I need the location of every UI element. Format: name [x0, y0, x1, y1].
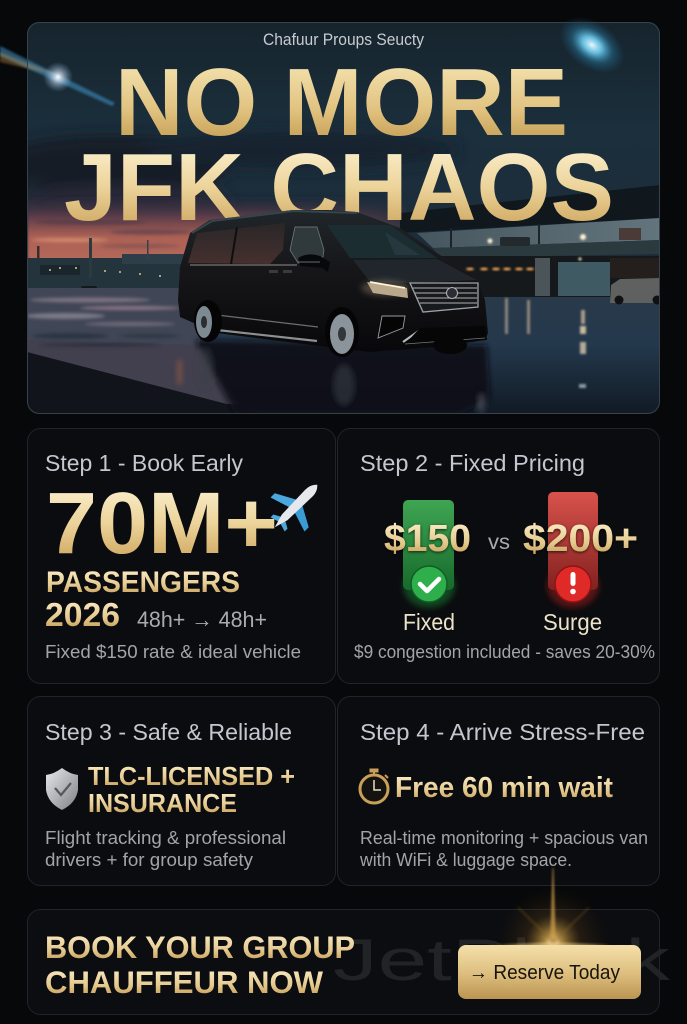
distant skyline	[28, 238, 184, 288]
panel: step 1	[28, 428, 336, 684]
step 3 description: drivers + for group safety	[45, 849, 254, 870]
step 3 description	[45, 827, 286, 870]
van headlight	[361, 280, 409, 296]
icon: stopwatch	[360, 769, 388, 803]
hero tagline: Chafuur Proups Seucty	[263, 30, 424, 49]
licence headline	[88, 761, 295, 818]
right ground light reflections	[505, 298, 586, 388]
step 4 description: with WiFi & luggage space.	[359, 849, 572, 870]
lens flare: right	[549, 6, 635, 84]
sky	[27, 22, 660, 258]
left wet ground, pink reflections	[25, 288, 240, 404]
step 1 heading: Step 1 - Book Early	[45, 450, 243, 476]
terminal glass band	[417, 218, 660, 248]
icon: shield	[46, 768, 78, 810]
CTA headline	[45, 929, 355, 1000]
headline	[66, 68, 610, 221]
surge price: $200+	[523, 518, 638, 560]
headline: JFK CHAOS	[64, 134, 614, 241]
reserve button: → Reserve Today	[469, 961, 621, 984]
panel: call to action	[28, 868, 672, 1014]
chart: surge price bar	[547, 492, 599, 608]
sunset glow	[28, 201, 405, 258]
fixed label: Fixed	[403, 609, 455, 635]
big stat 70M+: 70M+	[46, 475, 278, 572]
step 4 description: Real-time monitoring + spacious van	[360, 827, 648, 848]
black passenger van	[178, 210, 488, 357]
van door handles	[269, 270, 292, 273]
van mirror	[298, 254, 330, 272]
watermark: JetBlack	[333, 928, 672, 993]
terminal roof band	[400, 185, 660, 233]
step 4 description	[359, 827, 648, 870]
dark clouds	[28, 130, 455, 206]
panel: hero photo	[0, 22, 662, 414]
surge label: Surge	[543, 609, 602, 635]
van grille	[410, 283, 478, 312]
terminal lower hall	[440, 256, 660, 297]
headline: NO MORE	[115, 49, 568, 156]
van rear windows	[188, 223, 285, 264]
panel: step 4	[338, 696, 660, 886]
year 2026: 2026	[45, 596, 120, 633]
van windshield	[327, 225, 437, 258]
lens flare: left	[0, 46, 115, 106]
CTA headline: BOOK YOUR GROUP	[45, 929, 355, 965]
terminal awning	[433, 240, 659, 256]
step 1 description: Fixed $150 rate & ideal vehicle	[45, 641, 301, 662]
terminal building	[400, 185, 662, 304]
step 2 description: $9 congestion included - saves 20-30%	[354, 641, 655, 662]
van hood	[353, 259, 477, 283]
van side sills	[217, 315, 318, 327]
parked car	[610, 278, 660, 303]
CTA headline: CHAUFFEUR NOW	[45, 964, 323, 1000]
step 3 heading: Step 3 - Safe & Reliable	[45, 719, 292, 745]
passengers label: PASSENGERS	[46, 566, 240, 599]
hero border	[28, 22, 660, 414]
timing note: 48h+ → 48h+	[137, 607, 267, 632]
van chrome line	[190, 264, 297, 266]
step 4 heading: Step 4 - Arrive Stress-Free	[360, 719, 645, 745]
reserve button	[458, 945, 641, 999]
van door window	[290, 227, 324, 263]
gold burst glow	[495, 868, 611, 997]
ground	[200, 297, 660, 414]
step 2 heading: Step 2 - Fixed Pricing	[360, 450, 585, 476]
step 3 description: Flight tracking & professional	[45, 827, 286, 848]
van reflection	[178, 340, 490, 414]
van fog vent	[378, 316, 405, 338]
van wheels	[194, 300, 467, 357]
licence headline: INSURANCE	[88, 788, 237, 818]
panel: step 2	[338, 428, 660, 684]
fixed price: $150	[384, 518, 471, 560]
vs label: vs	[488, 531, 510, 554]
free wait headline: Free 60 min wait	[395, 772, 613, 804]
licence headline: TLC-LICENSED +	[88, 761, 295, 791]
icon: airplane	[258, 468, 334, 544]
van roof highlight	[192, 211, 357, 233]
dark road wedge	[28, 352, 232, 413]
chart: fixed price bar	[403, 500, 455, 608]
panel: step 3	[28, 696, 336, 886]
